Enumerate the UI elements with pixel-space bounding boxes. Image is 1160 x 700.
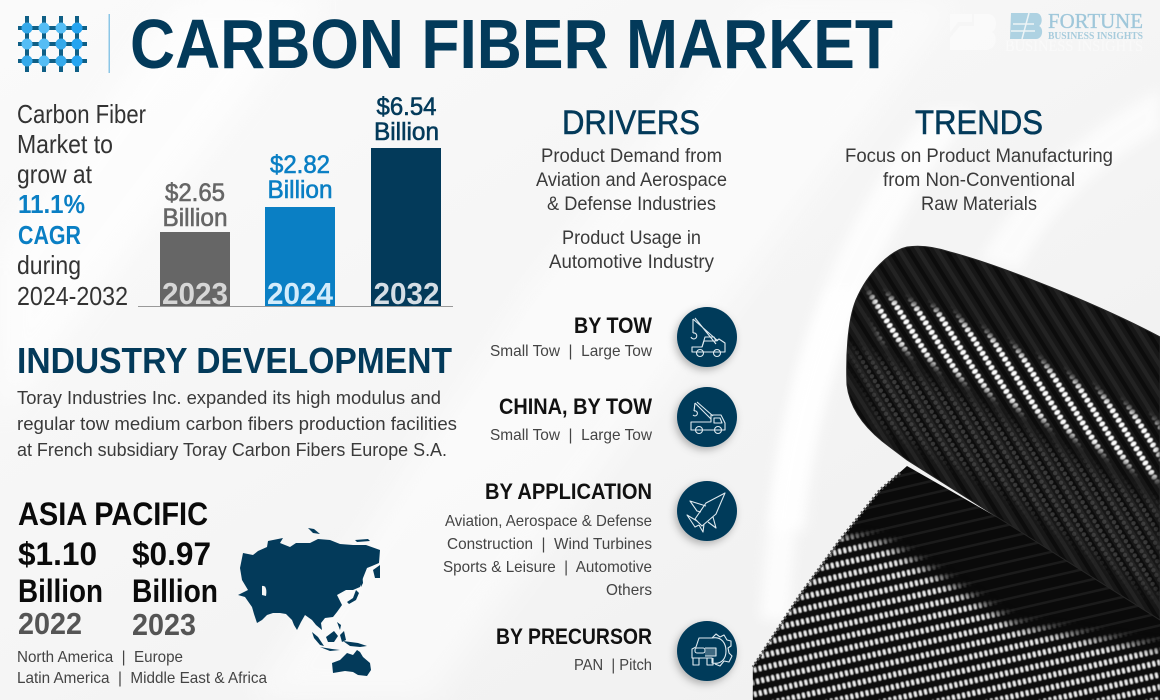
segment: by application: BY APPLICATION: [485, 479, 652, 504]
icon: carbon weave logo: [18, 16, 87, 72]
other regions: Latin America | Middle East & Africa: [17, 670, 267, 687]
title: CARBON FIBER MARKET: [130, 5, 893, 83]
figure: 2022: [18, 536, 103, 641]
segment: by precursor: PAN | Pitch: [574, 657, 652, 674]
bar: 2024: $2.82: [270, 151, 330, 179]
heading: trends: TRENDS: [915, 104, 1043, 142]
map: Asia Pacific: [238, 528, 380, 676]
bar: 2024: 2024: [267, 276, 334, 311]
image: lower carbon fiber sheet: [753, 466, 1160, 700]
text block: trends: from Non-Conventional: [883, 170, 1075, 191]
figure: 2022: Billion: [18, 573, 103, 609]
other regions: North America | Europe: [17, 649, 183, 666]
icon: tow truck: [677, 387, 737, 447]
bar chart: [138, 93, 453, 311]
text block: market growth: during: [17, 250, 81, 280]
text block: market growth: grow at: [17, 159, 93, 189]
bar: 2024: [265, 151, 335, 311]
text block: market growth: 11.1%: [18, 189, 85, 219]
text block: industry development: Toray Industries Inc. expanded its high modulus and: [17, 387, 441, 408]
text block: market growth: CAGR: [18, 220, 81, 250]
figure: 2023: [132, 536, 218, 642]
segment: by tow: [490, 313, 652, 360]
text block: drivers: Aviation and Aerospace: [536, 170, 727, 191]
figure: 2023: Billion: [132, 573, 218, 609]
bar: 2032: Billion: [374, 118, 439, 146]
bar: 2032: $6.54: [376, 93, 437, 121]
text block: drivers: Product Demand from: [541, 146, 722, 167]
segment: by precursor: [496, 624, 652, 674]
segment: china, by tow: CHINA, BY TOW: [499, 394, 652, 419]
text block: industry development: at French subsidiary Toray Carbon Fibers Europe S.A.: [17, 439, 447, 460]
text block: market growth: Carbon Fiber: [17, 99, 146, 129]
bar: 2023: Billion: [162, 204, 228, 232]
icon: fighter jet: [677, 481, 737, 541]
bar: 2023: 2023: [162, 276, 228, 311]
logo: Fortune Business Insights: BUSINESS INSIGHTS: [1005, 38, 1143, 55]
logo: Fortune Business Insights: BUSINESS INSIGHTS: [1048, 31, 1143, 42]
text block: market growth: [17, 99, 146, 311]
text block: drivers: & Defense Industries: [547, 194, 716, 215]
text block: drivers: [536, 146, 727, 273]
bar: 2032: 2032: [374, 276, 440, 311]
figure: 2022: $1.10: [18, 536, 97, 572]
text block: trends: [845, 146, 1113, 215]
segment: by application: Others: [606, 582, 652, 599]
logo: Fortune Business Insights: FORTUNE: [1048, 9, 1143, 33]
heading: industry development: INDUSTRY DEVELOPMENT: [17, 340, 452, 381]
icon: crane truck: [677, 307, 737, 367]
figure: 2023: $0.97: [132, 536, 211, 572]
figure: 2023: 2023: [132, 607, 196, 642]
text block: industry development: regular tow medium carbon fibers production facilities: [17, 413, 457, 434]
segment: by application: Aviation, Aerospace & Defense: [445, 513, 652, 530]
text block: drivers: Automotive Industry: [549, 252, 714, 273]
text block: drivers: Product Usage in: [562, 228, 701, 249]
segment: by precursor: BY PRECURSOR: [496, 624, 652, 649]
segment: china, by tow: [490, 394, 652, 444]
segment: by application: Sports & Leisure | Automotive: [443, 559, 652, 576]
segment: by tow: Small Tow | Large Tow: [490, 343, 652, 360]
segment: china, by tow: Small Tow | Large Tow: [490, 427, 652, 444]
text block: trends: Raw Materials: [921, 194, 1037, 215]
panel: Asia Pacific figures: ASIA PACIFIC: [18, 496, 208, 532]
segment: by tow: BY TOW: [574, 313, 652, 338]
panel: Asia Pacific figures: [17, 496, 267, 687]
text block: industry development: [17, 387, 457, 460]
text block: market growth: Market to: [17, 129, 113, 159]
segment: by application: Construction | Wind Turbines: [447, 536, 652, 553]
bar: 2032: [371, 93, 441, 311]
text block: market growth: 2024-2032: [17, 281, 128, 311]
bar: 2023: [160, 179, 230, 311]
other regions: [17, 649, 267, 687]
icon: car and gear: [677, 621, 737, 681]
text block: trends: Focus on Product Manufacturing: [845, 146, 1113, 167]
segment: by application: [443, 479, 652, 599]
bar: 2023: $2.65: [165, 179, 225, 207]
image: rolled carbon fiber: [847, 246, 1160, 620]
bar: 2024: Billion: [268, 176, 332, 204]
figure: 2022: 2022: [18, 606, 82, 641]
heading: drivers: DRIVERS: [562, 104, 700, 142]
logo: Fortune Business Insights: [950, 9, 1143, 55]
